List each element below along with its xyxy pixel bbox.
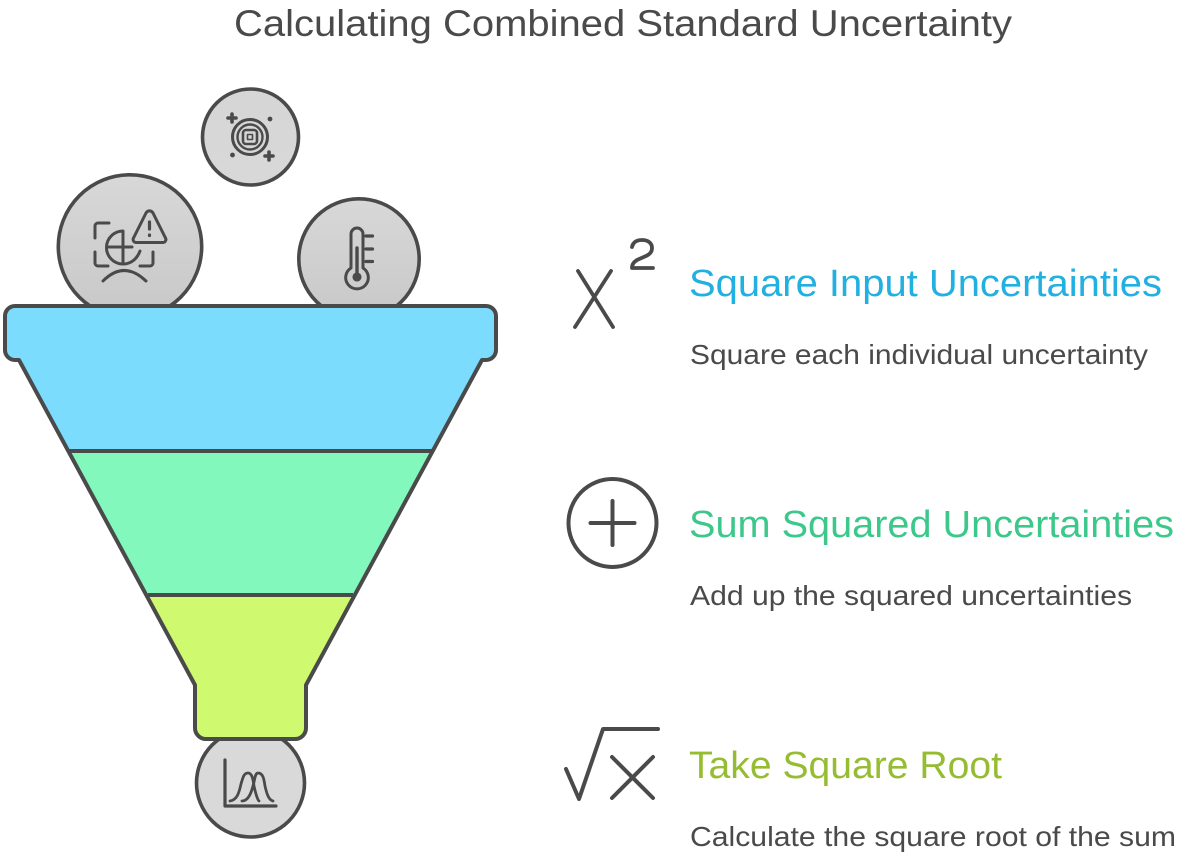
funnel band: green bbox=[69, 451, 432, 595]
circle: thermometer icon bbox=[299, 199, 419, 319]
description: square each uncertainty: Square each individual uncertainty bbox=[690, 339, 1148, 370]
circle: measurement warning icon bbox=[58, 175, 202, 318]
icon: x squared bbox=[575, 240, 653, 327]
funnel outline bbox=[5, 306, 496, 739]
funnel band: blue bbox=[5, 306, 496, 451]
description: add up: Add up the squared uncertainties bbox=[690, 580, 1132, 611]
heading: square input uncertainties: Square Input Uncertainties bbox=[689, 263, 1162, 305]
circle: target icon bbox=[202, 89, 298, 185]
icon: square root of x bbox=[566, 729, 658, 799]
funnel band: lime bbox=[148, 595, 353, 739]
circle: distribution curves icon bbox=[196, 729, 304, 837]
icon: plus in circle bbox=[568, 479, 656, 567]
title: Calculating Combined Standard Uncertainty bbox=[234, 3, 1013, 44]
heading: take square root: Take Square Root bbox=[689, 745, 1002, 787]
heading: sum squared uncertainties: Sum Squared Uncertainties bbox=[689, 504, 1174, 546]
description: calculate square root: Calculate the square root of the sum bbox=[690, 821, 1176, 852]
funnel diagram bbox=[5, 89, 496, 837]
